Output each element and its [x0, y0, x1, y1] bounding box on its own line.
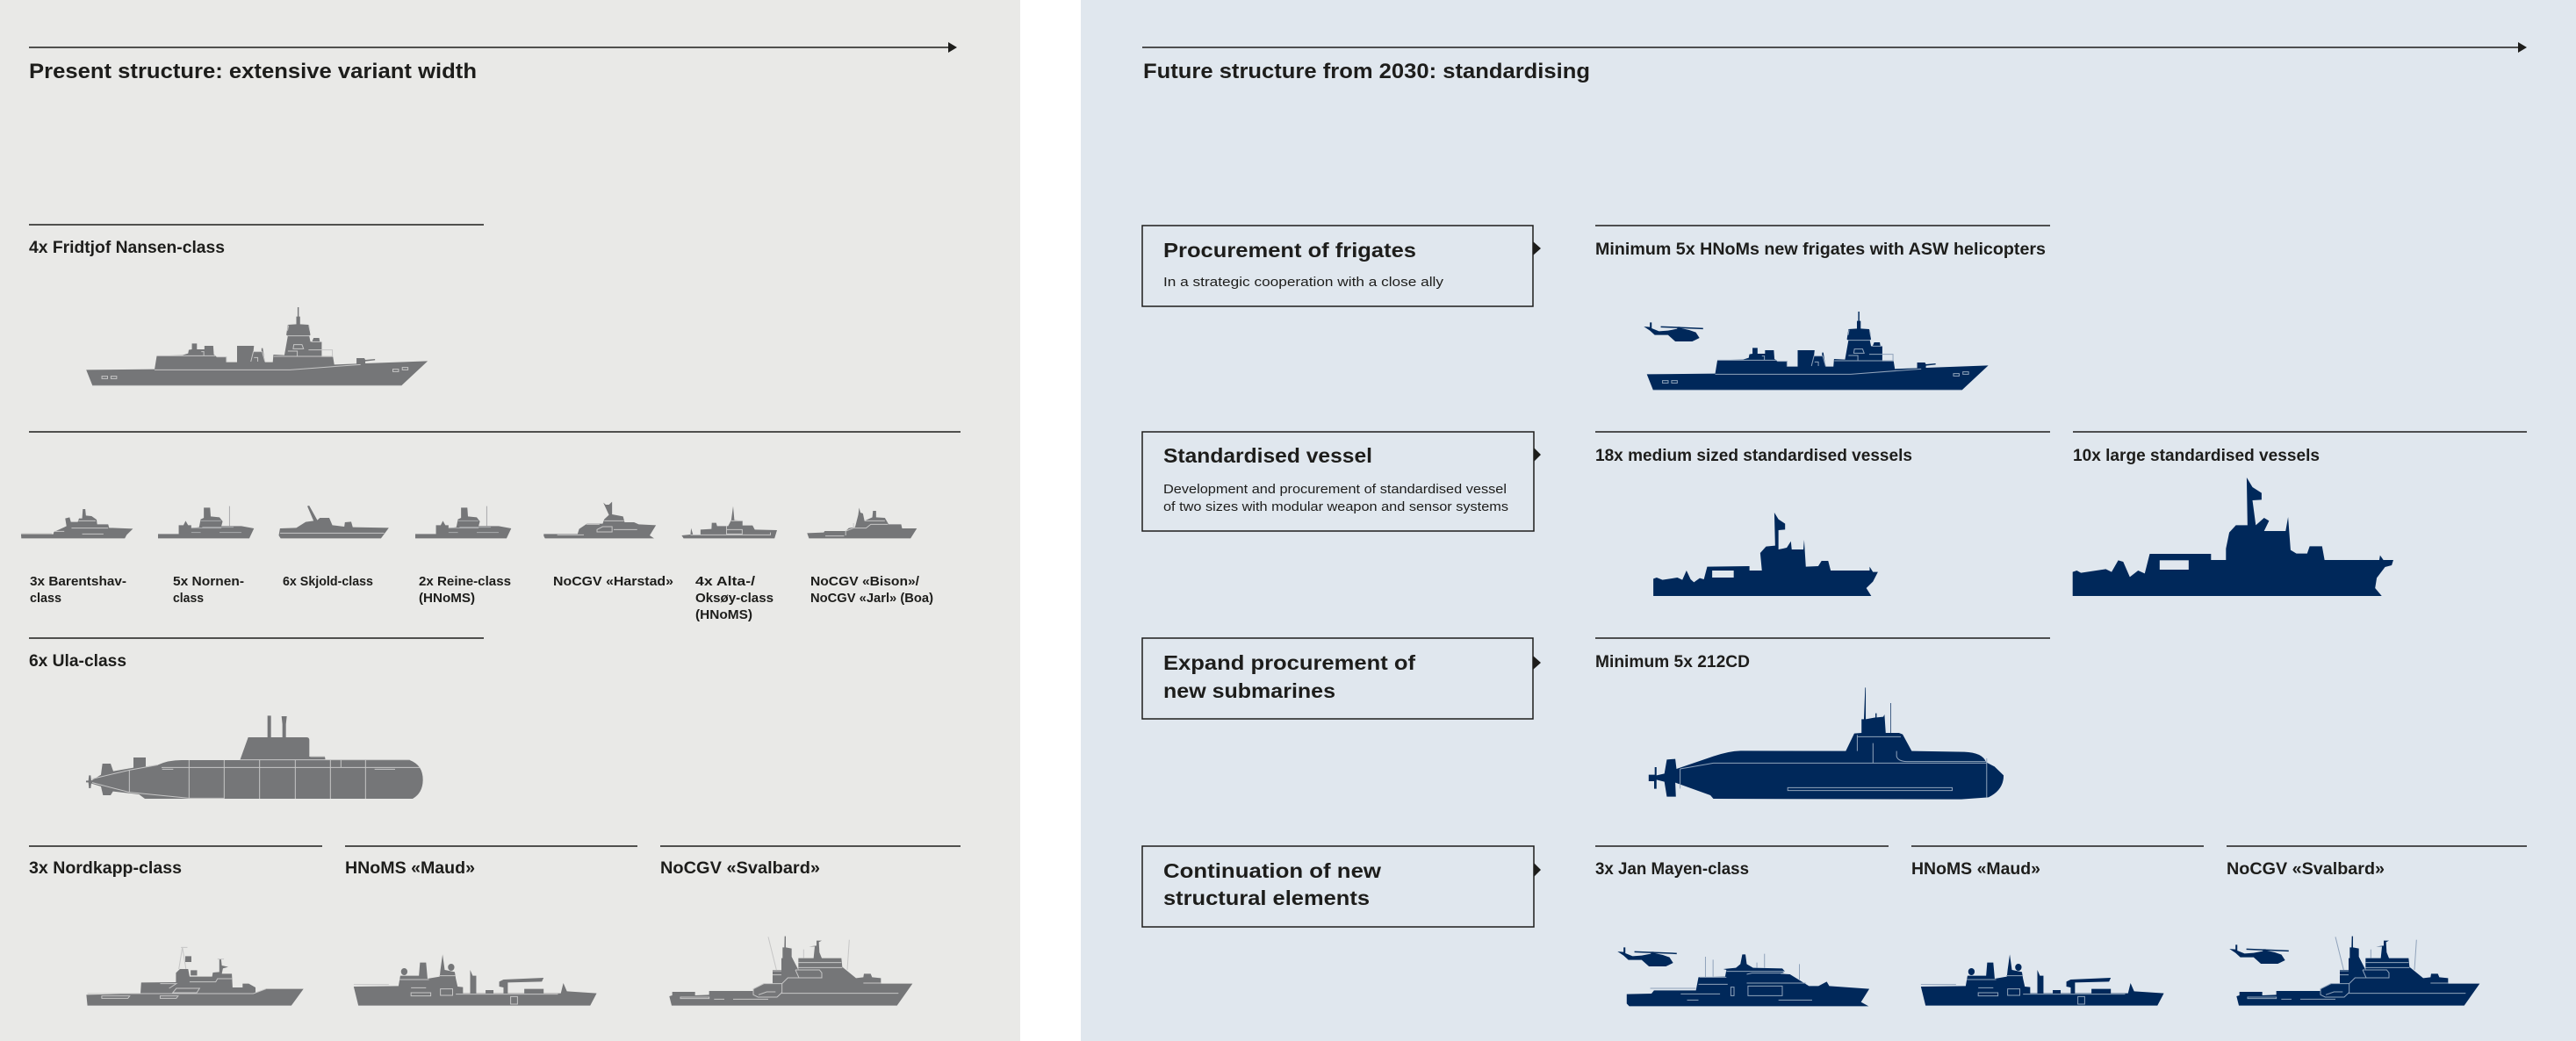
- label: Bison/Jarl: NoCGV «Jarl» (Boa): [810, 591, 933, 606]
- label: Reine-class: 2x Reine-class: [419, 574, 511, 589]
- heading: present structure: Present structure: extensive variant width: [29, 60, 477, 83]
- label: Reine-class: [419, 574, 511, 606]
- label: future Maud: HNoMS «Maud»: [1911, 860, 2040, 879]
- ship: future Maud: [1921, 954, 2164, 1006]
- ship: Nornen-class: [158, 506, 254, 538]
- label: Nornen-class: class: [173, 591, 204, 606]
- ship: Harstad: [543, 502, 656, 538]
- label: Bison/Jarl: [810, 574, 933, 606]
- label: Barentshav-class: [30, 574, 126, 606]
- label: Nornen-class: [173, 574, 244, 606]
- label: Alta/Oksøy-class: (HNoMS): [695, 607, 752, 622]
- submarine: 212CD: [1649, 687, 2004, 800]
- callout: procurement of frigates: Procurement of frigates: [1163, 239, 1416, 262]
- label: Reine-class: (HNoMS): [419, 591, 475, 606]
- ship: Maud: [354, 954, 597, 1006]
- ship: Reine-class: [415, 506, 511, 538]
- label: Harstad: NoCGV «Harstad»: [553, 574, 673, 589]
- arrow: present timeline: [29, 42, 957, 53]
- callout: standardised vessel: Development and procurement of standardised vessel: [1163, 482, 1507, 497]
- label: Ula-class: 6x Ula-class: [29, 652, 126, 671]
- panel: future structure: [1081, 0, 2576, 1041]
- ship: Fridtjof Nansen frigate: [86, 307, 428, 385]
- ship: Alta/Oksøy-class: [681, 506, 777, 538]
- callout: standardised vessel: of two sizes with modular weapon and sensor systems: [1163, 499, 1508, 514]
- ship: new frigate: [1647, 312, 1989, 390]
- icon: helicopter Svalbard: [2229, 944, 2289, 964]
- callout: continuation of new structural elements: [1142, 846, 1541, 927]
- panel: present structure: [0, 0, 1020, 1041]
- label: Nordkapp-class: 3x Nordkapp-class: [29, 859, 182, 878]
- ship: Nordkapp-class: [86, 947, 304, 1006]
- label: Svalbard: NoCGV «Svalbard»: [660, 859, 820, 878]
- callout: standardised vessel: Standardised vessel: [1163, 444, 1372, 467]
- ship: Svalbard: [669, 937, 912, 1006]
- ship: Skjold-class: [278, 506, 389, 538]
- ship: large standardised vessel: [2073, 477, 2393, 596]
- label: Nornen-class: 5x Nornen-: [173, 574, 244, 589]
- callout: continuation of new structural elements: structural elements: [1163, 887, 1370, 909]
- ship: Barentshav-class: [21, 509, 133, 538]
- label: Alta/Oksøy-class: Oksøy-class: [695, 591, 774, 606]
- label: medium vessels: 18x medium sized standardised vessels: [1595, 447, 1912, 465]
- callout: continuation of new structural elements: Continuation of new: [1163, 859, 1381, 882]
- label: future Svalbard: NoCGV «Svalbard»: [2227, 860, 2385, 879]
- label: large vessels: 10x large standardised vessels: [2073, 447, 2320, 465]
- callout: procurement of frigates: [1142, 226, 1541, 306]
- submarine: Ula-class: [86, 715, 423, 799]
- icon: helicopter: [1644, 322, 1703, 341]
- label: Alta/Oksøy-class: [695, 574, 774, 622]
- callout: expand procurement of new submarines: new submarines: [1163, 679, 1335, 702]
- label: Skjold-class: 6x Skjold-class: [283, 574, 373, 589]
- callout: expand procurement of new submarines: [1142, 638, 1541, 719]
- label: Alta/Oksøy-class: 4x Alta-/: [695, 574, 756, 589]
- ship: Jan Mayen-class: [1627, 954, 1869, 1006]
- label: Barentshav-class: class: [30, 591, 61, 606]
- arrow: future timeline: [1142, 42, 2527, 53]
- label: Maud: HNoMS «Maud»: [345, 859, 475, 878]
- label: Fridtjof Nansen-class: 4x Fridtjof Nansen-class: [29, 239, 225, 257]
- label: Barentshav-class: 3x Barentshav-: [30, 574, 126, 589]
- label: 212CD: Minimum 5x 212CD: [1595, 653, 1750, 671]
- label: Bison/Jarl: NoCGV «Bison»/: [810, 574, 920, 589]
- callout: procurement of frigates: In a strategic cooperation with a close ally: [1163, 275, 1444, 290]
- callout: expand procurement of new submarines: Expand procurement of: [1163, 651, 1415, 674]
- callout: standardised vessel: [1142, 432, 1541, 531]
- label: Jan Mayen-class: 3x Jan Mayen-class: [1595, 860, 1749, 879]
- label: new frigates: Minimum 5x HNoMs new frigates with ASW helicopters: [1595, 241, 2046, 259]
- ship: future Svalbard: [2236, 937, 2479, 1006]
- ship: Bison/Jarl: [807, 507, 917, 538]
- ship: medium standardised vessel: [1653, 513, 1878, 596]
- heading: future structure: Future structure from 2030: standardising: [1143, 60, 1590, 83]
- icon: helicopter Jan Mayen: [1617, 947, 1677, 966]
